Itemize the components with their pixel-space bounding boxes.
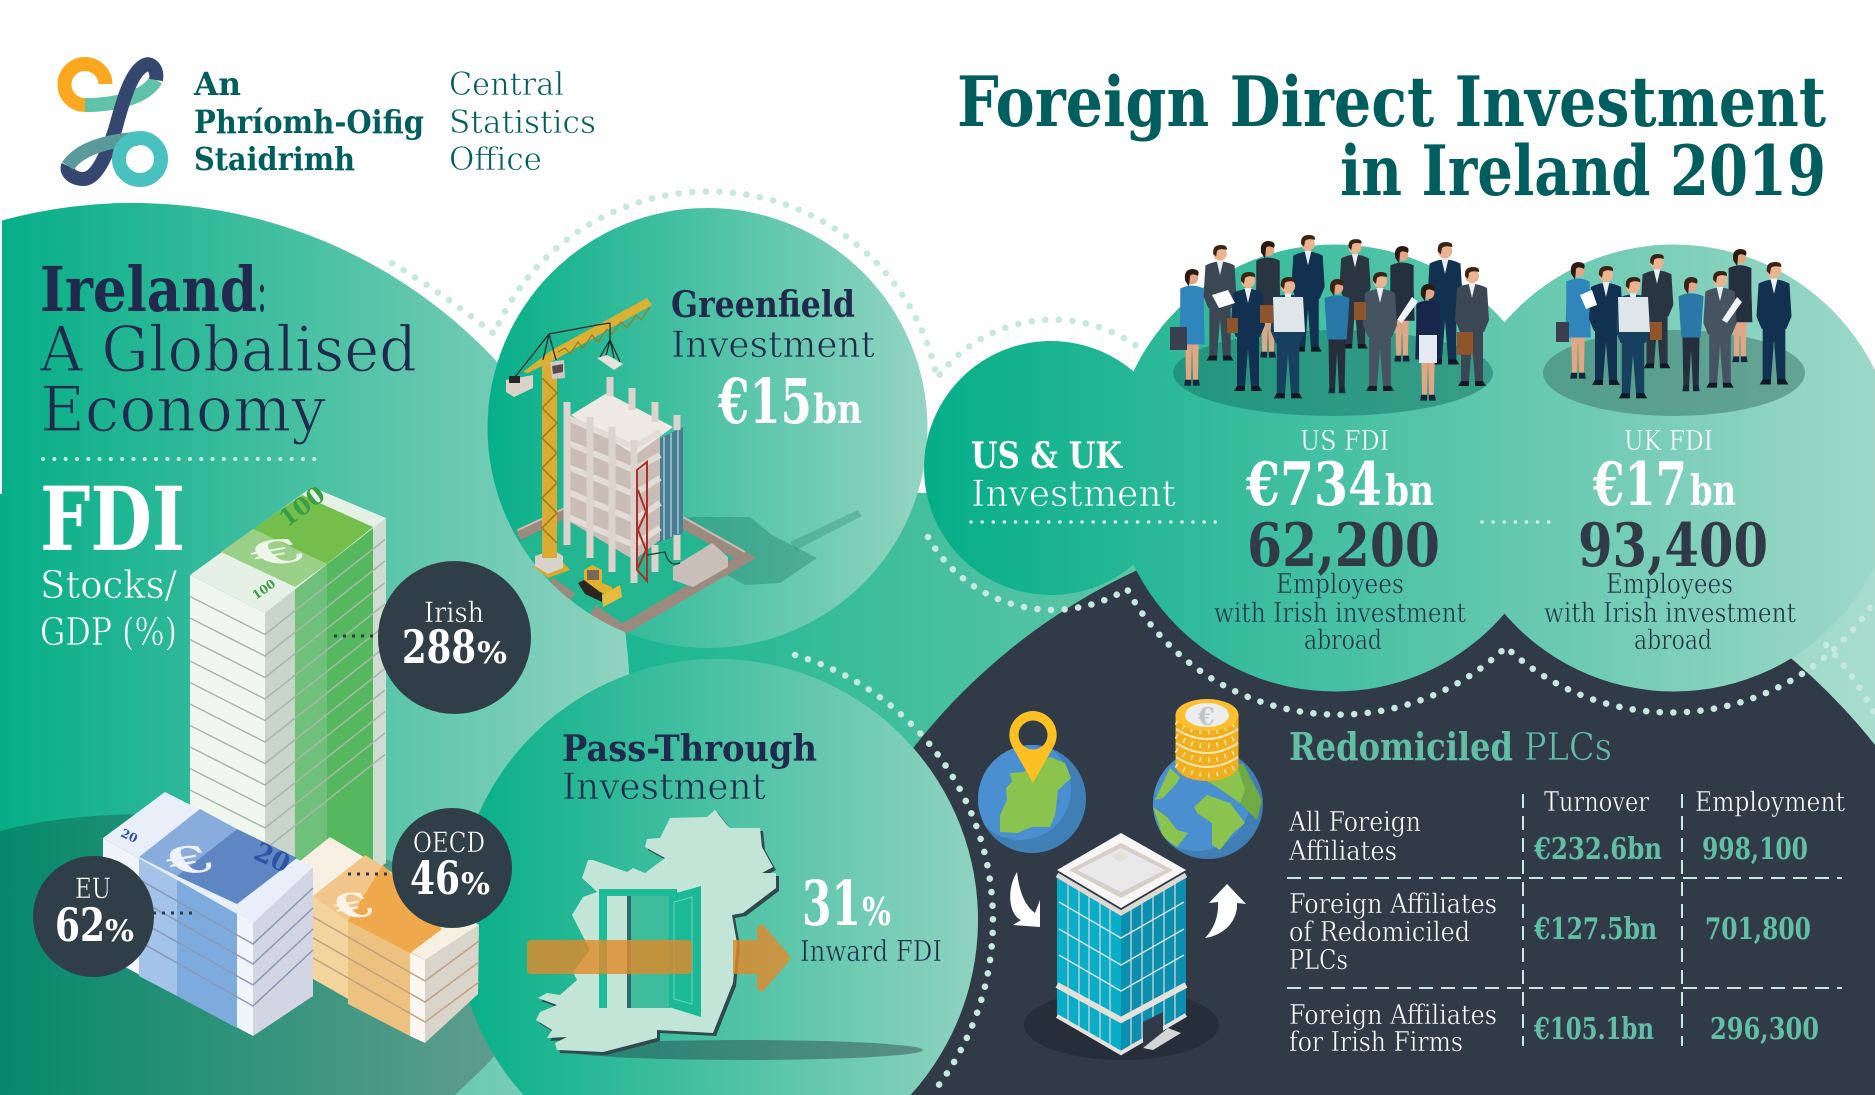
logo text: Irish: [193, 65, 424, 178]
heading: pass-through investment: [562, 728, 817, 808]
table: redomiciled PLCs: Turnover: [1544, 787, 1649, 818]
icon: green 100 euro stack: 100: [250, 577, 278, 602]
arrow: inward FDI: [527, 924, 790, 992]
stat block: UK FDI: [1544, 426, 1796, 656]
table: redomiciled PLCs: Employment: [1695, 787, 1845, 818]
stat block: UK FDI: abroad: [1634, 625, 1712, 656]
stat: 31% inward FDI: %: [862, 889, 891, 934]
table: redomiciled PLCs: Affiliates: [1288, 836, 1397, 867]
heading: FDI stocks to GDP: GDP (%): [40, 610, 177, 654]
heading: Ireland a globalised economy: [39, 253, 417, 446]
heading: pass-through investment: Investment: [562, 767, 767, 808]
callout: OECD 46%: [392, 808, 512, 928]
callout: EU 62%: EU: [75, 872, 111, 905]
leader lines for bubbles: [153, 636, 393, 913]
stat block: UK FDI: UK FDI: [1624, 426, 1713, 457]
illustration: construction site: [518, 377, 862, 630]
background green band: [560, 493, 1875, 1095]
icon: building shadow: [1024, 990, 1219, 1060]
icon: green 100 euro stack: [190, 479, 386, 958]
icon: globe with pin: [969, 711, 1086, 853]
icon: orange 50 euro stack: [280, 837, 479, 1043]
stat: 31% inward FDI: 31: [802, 867, 861, 940]
illustration: UK people group: [1543, 249, 1805, 416]
heading: redomiciled PLCs: Redomiciled: [1289, 724, 1513, 769]
stat block: UK FDI: €17: [1592, 450, 1687, 520]
heading: greenfield investment: Greenfield: [671, 284, 855, 326]
illustration: crane: [506, 298, 652, 578]
icon: blue 20 euro stack: [103, 792, 313, 1036]
heading: Ireland a globalised economy: A Globalised: [39, 313, 417, 386]
table: redomiciled PLCs: 701,800: [1705, 912, 1811, 947]
panel: pass-through circle: [456, 659, 978, 1095]
heading: greenfield investment: Investment: [671, 325, 876, 366]
panel: redomiciled PLCs background: [784, 513, 1875, 1095]
table: redomiciled PLCs: of Redomiciled: [1289, 917, 1470, 948]
arrow: out of building: [1205, 884, 1246, 938]
heading: pass-through investment: Pass-Through: [562, 728, 817, 770]
icon: blue 20 euro stack: 20: [249, 837, 295, 880]
table: redomiciled PLCs: [1287, 787, 1845, 1058]
heading: FDI stocks to GDP: FDI: [40, 467, 185, 571]
heading: US and UK investment: US & UK: [971, 435, 1123, 477]
panel: greenfield circle: [488, 208, 928, 648]
callout: Irish 288%: 288: [402, 620, 476, 674]
callout: Irish 288%: Irish: [424, 596, 484, 629]
heading: greenfield investment: bn: [813, 386, 862, 433]
heading: redomiciled PLCs: PLCs: [1524, 725, 1612, 769]
illustration: US people group: [1170, 235, 1493, 416]
stat block: US FDI: with Irish investment: [1214, 598, 1466, 629]
logo text: English: Statistics: [449, 103, 596, 141]
heading: Ireland a globalised economy: Ireland: [40, 253, 257, 326]
heading: US and UK investment: Investment: [971, 474, 1177, 515]
logo text: Irish: Phríomh-Oifig: [194, 103, 424, 141]
callout: OECD 46%: 46: [410, 851, 460, 905]
logo text: English: [449, 65, 596, 178]
stat block: US FDI: US FDI: [1300, 426, 1389, 457]
icon: globe with coins: [1141, 699, 1263, 859]
panel: Ireland globalised economy: [0, 200, 630, 1095]
icon: orange 50 euro stack: €: [321, 884, 384, 928]
callout: OECD 46%: %: [461, 867, 490, 902]
callout: Irish 288%: [378, 561, 531, 714]
stat block: US FDI: bn: [1385, 466, 1434, 515]
icon: skyscraper: [1057, 833, 1186, 1054]
logo text: English: Office: [449, 140, 542, 178]
callout: EU 62%: %: [105, 914, 134, 949]
table: redomiciled PLCs: 296,300: [1710, 1012, 1819, 1047]
logo text: Irish: Staidrimh: [194, 140, 355, 178]
callout: OECD 46%: OECD: [413, 826, 485, 859]
stat: 31% inward FDI: Inward FDI: [800, 934, 942, 968]
logo text: English: Central: [449, 65, 564, 103]
logo text: Irish: An: [193, 65, 241, 103]
stat block: UK FDI: bn: [1690, 466, 1736, 515]
stat block: UK FDI: with Irish investment: [1544, 598, 1796, 629]
icon: green 100 euro stack: €: [236, 531, 317, 574]
dotted connector lines: [392, 192, 1875, 1090]
heading: Ireland a globalised economy: :: [257, 253, 267, 326]
stat: 31% inward FDI: [800, 867, 942, 968]
table: redomiciled PLCs: PLCs: [1289, 945, 1348, 976]
logo icon: [65, 64, 161, 180]
callout: EU 62%: 62: [55, 898, 105, 952]
heading: FDI stocks to GDP: Stocks/: [40, 563, 177, 607]
map shadow: [563, 1040, 923, 1060]
icon: blue 20 euro stack: 20: [119, 826, 140, 846]
arrow: into building: [1010, 872, 1040, 927]
stat block: UK FDI: Employees: [1606, 569, 1733, 600]
callout: Irish 288%: %: [477, 636, 507, 671]
table: redomiciled PLCs: €232.6bn: [1533, 832, 1662, 867]
illustration: bulldozer: [578, 565, 622, 607]
table: redomiciled PLCs: 998,100: [1702, 832, 1808, 867]
stat block: US FDI: [1214, 426, 1466, 656]
table: redomiciled PLCs: €127.5bn: [1533, 912, 1657, 947]
heading: Ireland a globalised economy: Economy: [40, 373, 326, 446]
stat block: US FDI: Employees: [1276, 569, 1404, 600]
heading: greenfield investment: €15: [717, 365, 812, 438]
icon: green 100 euro stack: 100: [273, 479, 331, 533]
panel: US and UK circles: [924, 244, 1875, 692]
heading: FDI stocks to GDP: [40, 467, 185, 654]
table: redomiciled PLCs: for Irish Firms: [1289, 1027, 1463, 1058]
illustration: map of Ireland with door: [536, 810, 779, 1055]
table: redomiciled PLCs: Foreign Affiliates: [1289, 1000, 1497, 1031]
callout: EU 62%: [33, 856, 154, 977]
title: [957, 62, 1826, 212]
icon: blue 20 euro stack: €: [153, 837, 225, 885]
stat block: UK FDI: 93,400: [1578, 511, 1768, 581]
table: redomiciled PLCs: Foreign Affiliates: [1289, 889, 1497, 920]
heading: greenfield investment: [671, 284, 876, 438]
table: redomiciled PLCs: €105.1bn: [1533, 1012, 1654, 1047]
icon: globe with coins: €: [1197, 702, 1215, 731]
stat block: US FDI: abroad: [1304, 625, 1382, 656]
stat block: US FDI: €734: [1245, 450, 1382, 520]
stat block: US FDI: 62,200: [1247, 511, 1440, 581]
table: redomiciled PLCs: All Foreign: [1288, 807, 1421, 838]
heading: US and UK investment: [971, 435, 1177, 515]
